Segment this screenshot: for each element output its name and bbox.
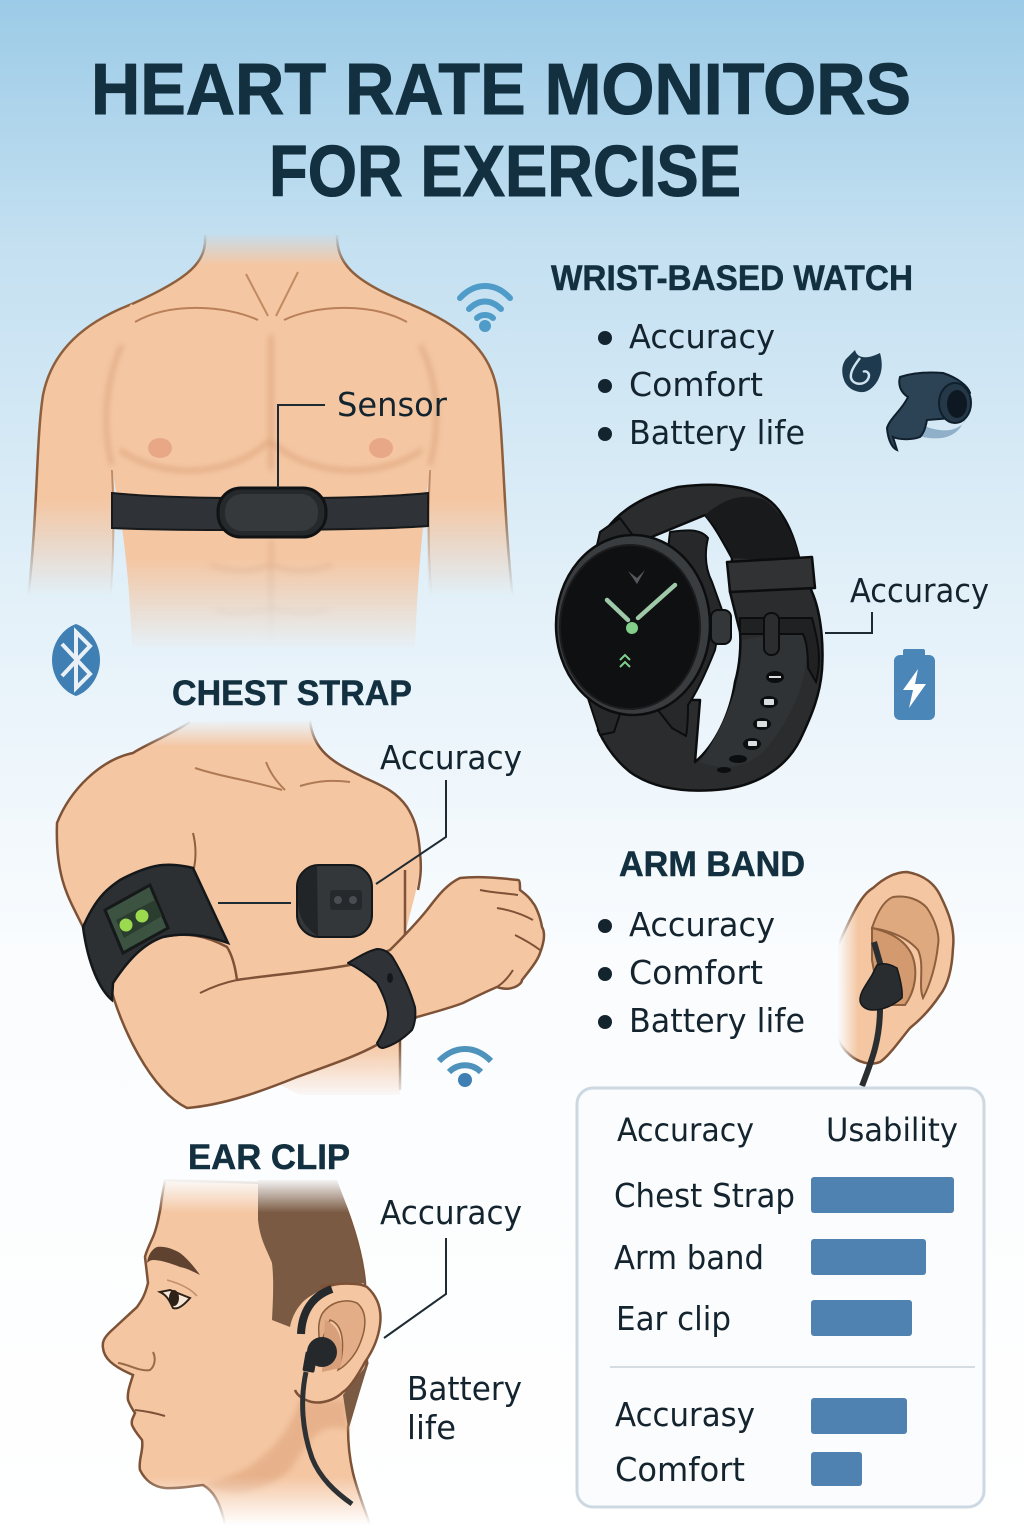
strap holes [717,671,784,773]
arms [28,304,513,600]
torso [57,720,421,1095]
icon: small sensor device [887,372,971,450]
eye [160,1290,190,1308]
row: arm band: Arm band [614,1238,764,1277]
ear hook and earbud [301,1289,332,1334]
list: arm band features: Comfort [629,953,763,992]
connector line [218,902,291,904]
sensor leader line [278,405,325,488]
row: accurasy: Accurasy [615,1395,755,1434]
battery life label: life [407,1408,456,1447]
sensor pod [218,488,326,537]
title [91,50,911,212]
row: ear clip: Ear clip [616,1299,731,1338]
eyebrow [147,1247,200,1275]
illustration: chest strap torso [28,235,513,650]
accuracy label with leader [376,738,522,884]
neck shadow [205,1400,348,1493]
list: wrist-based watch features [598,317,805,452]
title: FOR EXERCISE [269,132,741,212]
illustration: ear with clip [838,872,953,1086]
list: wrist-based watch features: Accuracy [629,317,775,356]
row: chest strap [614,1176,954,1215]
icon: battery [894,649,935,720]
ear [295,1284,380,1403]
arm and fist [110,877,544,1108]
row: comfort: Comfort [615,1450,745,1489]
accuracy label with leader [825,571,989,633]
row: accurasy [615,1395,907,1434]
crown [711,610,731,644]
heading: wrist-based watch: WRIST-BASED WATCH [551,259,913,298]
icon: wifi lower [439,1049,491,1087]
strap [598,485,823,791]
strap [112,493,428,530]
list: wrist-based watch features: Battery life [629,413,805,452]
accuracy label with leader [380,1193,522,1338]
heading: chest strap: CHEST STRAP [172,674,412,713]
column headers: Accuracy [617,1111,754,1149]
hair [258,1180,365,1327]
torso [106,235,436,650]
row: chest strap: Chest Strap [614,1176,795,1215]
buckle [740,618,819,682]
list: wrist-based watch features: Comfort [629,365,763,404]
nostril [118,1352,155,1370]
list: arm band features: Battery life [629,1001,805,1040]
wrist band [348,949,415,1048]
accuracy label with leader: Accuracy [850,571,989,610]
list: arm band features: Accuracy [629,905,775,944]
mouth [135,1410,165,1416]
watch hands [607,585,675,620]
case [556,535,710,715]
panel: comparison chart [577,1088,984,1507]
icon: wifi top [460,286,510,329]
battery life label [407,1369,522,1447]
column headers [617,1111,958,1149]
list: arm band features [598,905,805,1040]
row: arm band [614,1238,926,1277]
armband strap [83,865,228,1000]
title: HEART RATE MONITORS [91,50,911,130]
sensor label: Sensor [337,385,447,424]
chest pod [297,865,372,937]
heading: arm band: ARM BAND [619,845,805,884]
illustration: arm band [57,720,544,1108]
accuracy label with leader: Accuracy [380,738,522,777]
row: ear clip [616,1299,912,1338]
heading: ear clip: EAR CLIP [188,1138,350,1177]
lugs [582,518,722,736]
armband sensor [105,885,168,953]
illustration: smartwatch [556,485,823,791]
column headers: Usability [826,1111,958,1149]
accuracy label with leader: Accuracy [380,1193,522,1232]
icon: flame drop [842,350,882,392]
row: comfort [615,1450,862,1489]
battery life label: Battery [407,1369,522,1408]
illustration: head profile [103,1180,380,1525]
buckle keeper [727,557,815,592]
icon: bluetooth [52,624,100,696]
